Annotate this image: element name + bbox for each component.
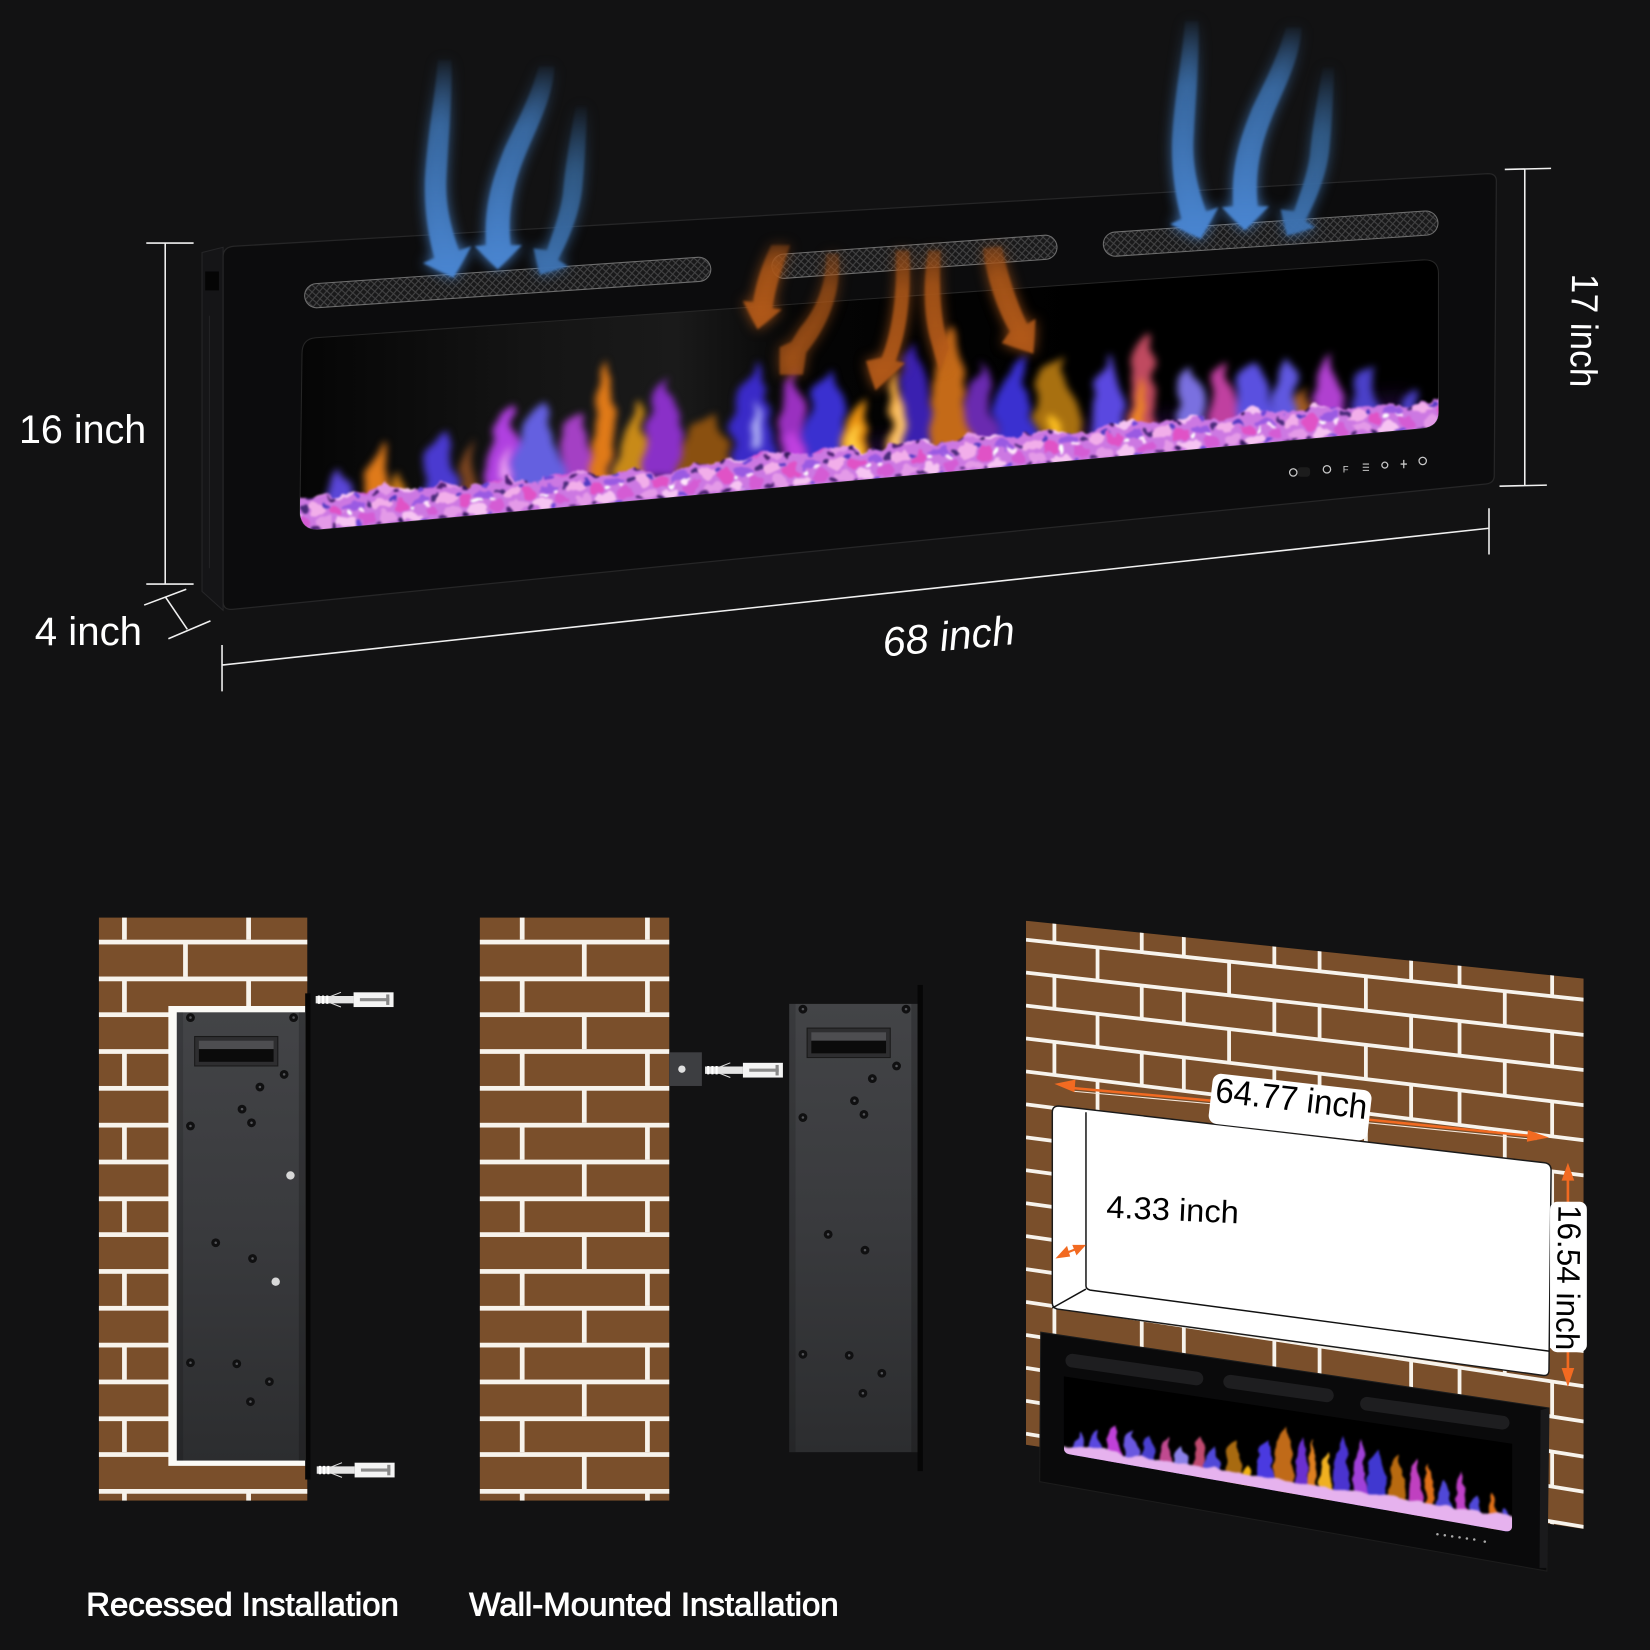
firebox window	[300, 260, 1438, 530]
flames	[289, 329, 1452, 547]
warm air outlet arrows	[743, 245, 1035, 390]
dimension: 16 inch height	[146, 243, 194, 584]
brick wall perspective	[1026, 910, 1584, 1536]
fireplace back panel	[177, 993, 310, 1480]
cool air intake arrows right	[1170, 21, 1334, 239]
panel bright screws	[271, 1171, 295, 1286]
fireplace back panel	[789, 985, 923, 1471]
small side panel	[1540, 1408, 1549, 1568]
fireplace main illustration	[202, 174, 1496, 610]
bottom wall anchor	[317, 1463, 395, 1477]
label: 16 inch: 16 inch	[19, 408, 146, 452]
mounting bracket	[669, 1052, 702, 1086]
label: 16.54 inch: 16.54 inch	[1549, 1205, 1588, 1351]
dimension: 4 inch depth	[144, 589, 210, 639]
top vent right	[1115, 223, 1426, 244]
wall anchor	[705, 1063, 783, 1078]
small flames	[1058, 1425, 1515, 1538]
cool air intake arrows left	[423, 60, 587, 278]
control panel icons	[1290, 457, 1426, 477]
wall opening	[168, 1006, 307, 1466]
white recess opening	[1052, 1106, 1551, 1376]
brick wall middle	[480, 918, 669, 1501]
label: 4.33 inch: 4.33 inch	[1106, 1189, 1240, 1230]
small crystal bed	[1058, 1444, 1515, 1538]
small firebox	[1064, 1376, 1512, 1531]
height arrow	[1562, 1163, 1574, 1387]
caption: wall-mounted installation: Wall-Mounted Installation	[469, 1585, 839, 1622]
wall-mounted installation diagram	[480, 918, 923, 1501]
dimension: 68 inch width	[222, 508, 1489, 691]
small fireplace body	[1040, 1332, 1549, 1571]
depth arrow	[1055, 1245, 1086, 1259]
recess cut-out diagram	[1026, 910, 1588, 1571]
width arrow	[1054, 1080, 1549, 1142]
caption: recessed installation: Recessed Installation	[86, 1585, 399, 1622]
brick wall left	[99, 918, 307, 1501]
label: 64.77 inch: 64.77 inch	[1213, 1072, 1369, 1127]
fireplace front panel	[223, 174, 1496, 609]
crystal bed	[300, 396, 1438, 530]
top vent left	[317, 269, 699, 296]
label: 68 inch: 68 inch	[880, 607, 1017, 666]
small control dots	[1436, 1533, 1486, 1543]
small fireplace	[1040, 1332, 1549, 1571]
top wall anchor	[316, 992, 394, 1007]
small vents	[1072, 1361, 1503, 1423]
label: 4 inch: 4 inch	[35, 610, 142, 654]
label: 17 inch: 17 inch	[1561, 273, 1605, 388]
control panel icons: F	[1343, 464, 1349, 475]
dimension: 17 inch height	[1500, 168, 1551, 486]
top vent centre	[784, 247, 1045, 266]
fireplace side panel	[202, 247, 223, 610]
recessed installation diagram	[99, 918, 395, 1501]
